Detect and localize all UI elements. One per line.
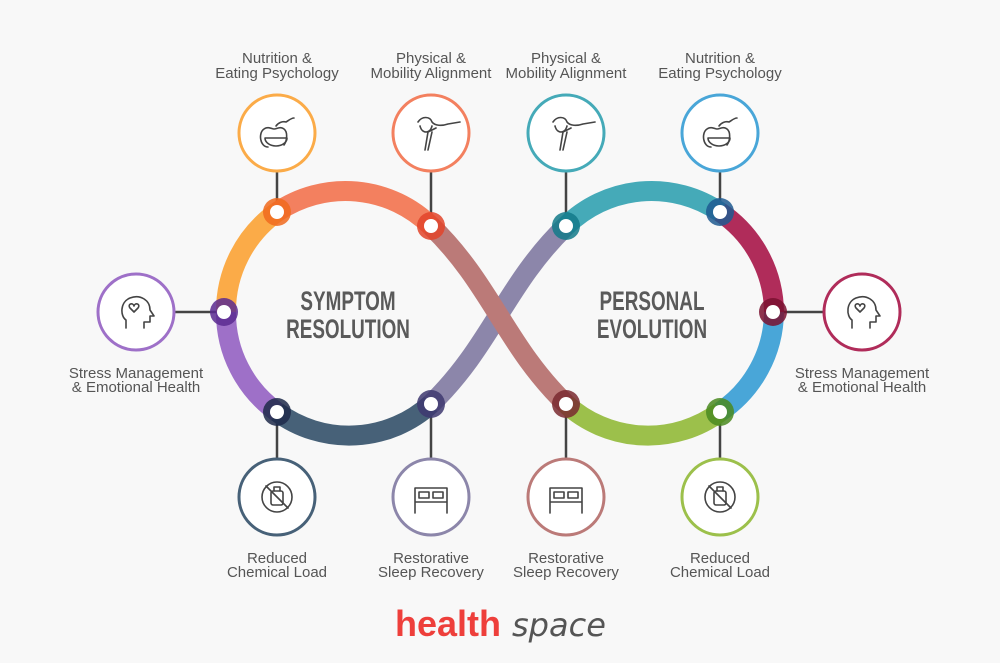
logo — [395, 603, 606, 644]
labels: & Emotional Health — [798, 379, 926, 396]
labels: Restorative — [528, 550, 604, 567]
icon: bed right — [550, 488, 582, 513]
title: personal evolution: PERSONAL — [600, 286, 704, 316]
labels: Mobility Alignment — [506, 65, 627, 82]
icon: no chemical right — [705, 482, 735, 512]
labels: Nutrition & — [685, 50, 755, 67]
icon: bed — [415, 488, 447, 513]
labels: Restorative — [393, 550, 469, 567]
title: symptom resolution: SYMPTOM — [300, 286, 396, 316]
title: symptom resolution — [286, 286, 410, 344]
labels: Eating Psychology — [215, 65, 339, 82]
labels: Physical & — [396, 50, 466, 67]
labels: Sleep Recovery — [513, 564, 619, 581]
logo: space — [512, 606, 606, 644]
infinity loop — [226, 191, 774, 436]
connector lines — [174, 171, 824, 459]
labels: Stress Management — [795, 365, 930, 382]
labels: Nutrition & — [242, 50, 312, 67]
title: personal evolution — [597, 286, 707, 344]
labels: Reduced — [690, 550, 750, 567]
labels: Physical & — [531, 50, 601, 67]
icon: fruit — [261, 118, 294, 147]
labels: & Emotional Health — [72, 379, 200, 396]
icon: head heart right — [848, 297, 880, 328]
labels: Reduced — [247, 550, 307, 567]
icon: yoga — [418, 118, 460, 150]
icon: head heart — [122, 297, 154, 328]
title: symptom resolution: RESOLUTION — [286, 314, 410, 344]
node markers — [210, 198, 787, 426]
labels: Eating Psychology — [658, 65, 782, 82]
icon: no chemical — [262, 482, 292, 512]
labels: Mobility Alignment — [371, 65, 492, 82]
labels — [69, 50, 930, 581]
labels: Sleep Recovery — [378, 564, 484, 581]
icon circles — [98, 95, 900, 535]
labels: Chemical Load — [227, 564, 327, 581]
title: personal evolution: EVOLUTION — [597, 314, 707, 344]
icon: fruit right — [704, 118, 737, 147]
logo: health — [395, 603, 501, 644]
icon: yoga right — [553, 118, 595, 150]
labels: Chemical Load — [670, 564, 770, 581]
labels: Stress Management — [69, 365, 204, 382]
